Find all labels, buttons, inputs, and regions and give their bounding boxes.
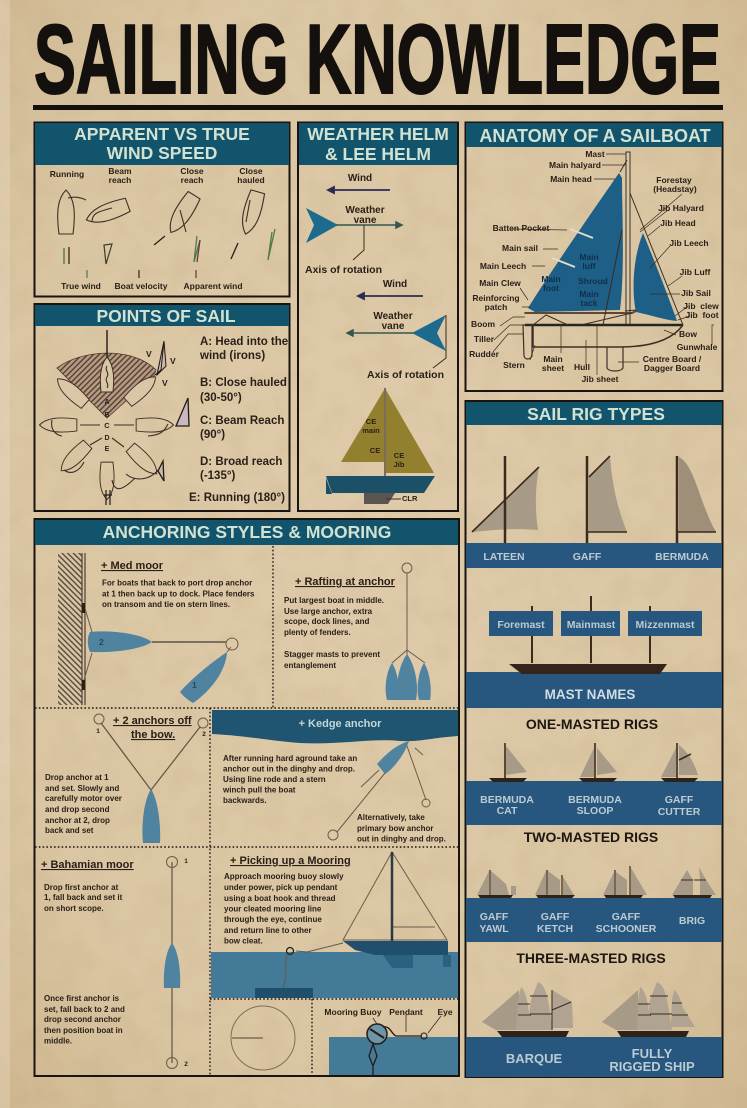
section: picking up a mooring: under power, pick up pendant xyxy=(224,883,338,892)
part labels: Main Leech xyxy=(480,261,526,271)
section: one-masted rigs: BERMUDA xyxy=(480,794,534,806)
section: one-masted rigs: CUTTER xyxy=(658,806,701,818)
heading: apparent vs true wind speed: APPARENT VS TRUE xyxy=(74,124,250,144)
point of sail labels: hauled xyxy=(237,175,265,185)
section: two anchors off the bow: + 2 anchors off xyxy=(113,715,192,727)
section: three-masted rigs: BARQUE xyxy=(506,1051,562,1066)
diagram: weather vane one: Wind xyxy=(348,173,372,184)
section: kedge anchor: + Kedge anchor xyxy=(299,718,382,730)
section: rafting at anchor: scope, dock lines, and xyxy=(284,617,369,626)
legend text: points of sail: B: Close hauled xyxy=(200,377,287,389)
diagram: weather vane two: Wind xyxy=(383,279,407,290)
section: anchor circle xyxy=(231,1006,295,1070)
icon: four boat hulls xyxy=(58,190,266,237)
section: two-masted rigs: SCHOONER xyxy=(596,923,657,935)
legend text: points of sail: (90°) xyxy=(200,429,225,441)
label leader lines xyxy=(493,154,714,375)
section: two anchors off the bow xyxy=(45,714,208,843)
part labels: Forestay xyxy=(656,175,692,185)
part labels: Bow xyxy=(679,329,697,339)
part labels: Jib Head xyxy=(660,218,696,228)
section: one-masted rigs: CAT xyxy=(497,805,518,817)
legend text: points of sail: wind (irons) xyxy=(199,350,265,362)
part labels: Main Clew xyxy=(479,278,521,288)
part labels: Jib Luff xyxy=(680,267,711,277)
section: bahamian moor: middle. xyxy=(44,1036,72,1046)
section: two-masted rigs: GAFF xyxy=(480,911,509,923)
section: bahamian moor xyxy=(41,856,188,1068)
chart: no-sail zone and boats: V xyxy=(170,356,176,366)
section: picking up a mooring: through the eye, continue xyxy=(224,915,322,924)
section: two-masted rigs: YAWL xyxy=(479,923,509,935)
section: one-masted rigs: SLOOP xyxy=(577,805,613,817)
section: mooring buoy detail: Pendant xyxy=(389,1007,423,1017)
section: one-masted rigs xyxy=(466,716,722,825)
part labels: tack xyxy=(580,298,598,308)
diagram: weather vane two: Axis of rotation xyxy=(367,369,444,381)
part labels: sheet xyxy=(542,363,564,373)
diagram: weather vane one: Axis of rotation xyxy=(305,264,382,276)
rig: lateen, gaff, bermuda xyxy=(466,456,722,568)
section: mooring buoy detail xyxy=(324,1007,458,1076)
panel: anchoring styles and mooring xyxy=(34,519,459,1076)
part labels: luff xyxy=(582,261,596,271)
part labels: Jib Leech xyxy=(669,238,709,248)
section: one-masted rigs: ONE-MASTED RIGS xyxy=(526,716,658,732)
section: picking up a mooring: bow cleat. xyxy=(224,936,263,946)
legend text: points of sail: (30-50°) xyxy=(200,392,242,404)
section: mooring buoy detail: Eye xyxy=(437,1007,453,1017)
diagram: weather vane two: Weather xyxy=(373,311,413,322)
part labels: Main sail xyxy=(502,243,538,253)
section: kedge anchor: After running hard aground take an xyxy=(223,754,357,763)
part labels: Jib clew xyxy=(683,301,719,311)
part labels: Batten Pocket xyxy=(493,223,550,233)
section: rafting at anchor: entanglement xyxy=(284,661,336,670)
diagram: sailboat xyxy=(469,149,719,384)
heading: anchoring styles and mooring: ANCHORING STYLES & MOORING xyxy=(103,522,391,542)
panel: sail rig types xyxy=(466,401,722,1077)
diagram: mast names: Foremast xyxy=(497,619,545,631)
part labels: Main halyard xyxy=(549,160,601,170)
section: two anchors off the bow: back and set xyxy=(45,826,94,835)
part labels: foot xyxy=(543,283,559,293)
diagram: sailboat centre of effort: main xyxy=(362,426,380,435)
boat: gaff schooner xyxy=(603,866,647,898)
section: picking up a mooring: + Picking up a Mooring xyxy=(230,855,351,867)
part labels: Main xyxy=(579,252,599,262)
legend text: points of sail: D: Broad reach xyxy=(200,456,282,468)
diagram: mast names: Mizzenmast xyxy=(636,619,695,631)
part labels: Tiller xyxy=(474,334,495,344)
section: kedge anchor: Using line rode and a stern xyxy=(223,775,326,784)
section: kedge anchor: winch pull the boat xyxy=(222,786,296,794)
section: rafting at anchor: Stagger masts to prevent xyxy=(284,650,380,659)
chart: no-sail zone and boats: E xyxy=(105,446,110,453)
part labels: Centre Board / xyxy=(643,354,702,364)
panel: anatomy of a sailboat xyxy=(466,122,722,391)
section: bahamian moor: + Bahamian moor xyxy=(41,859,134,871)
boat: gaff yawl xyxy=(477,870,516,898)
part labels: Main head xyxy=(550,174,592,184)
section: rafting at anchor: plenty of fenders. xyxy=(284,628,351,637)
section: two-masted rigs xyxy=(466,829,722,942)
section: med moor: on transom and tie on stern lines. xyxy=(102,600,230,609)
legend text: points of sail: E: Running (180°) xyxy=(189,492,285,504)
section: bahamian moor: Once first anchor is xyxy=(44,994,120,1003)
ship: barque xyxy=(482,982,573,1037)
section: bahamian moor: on short scope. xyxy=(44,904,104,913)
chart: no-sail zone and boats: A xyxy=(104,399,110,406)
section: picking up a mooring: and return line to other xyxy=(224,926,312,935)
rig: lateen, gaff, bermuda: BERMUDA xyxy=(655,551,709,563)
heading: weather helm and lee helm: WEATHER HELM xyxy=(307,124,449,144)
part labels: Gunwhale xyxy=(677,342,718,352)
part labels: Jib foot xyxy=(685,310,719,320)
section: mooring buoy detail: Mooring Buoy xyxy=(324,1007,382,1017)
section: kedge anchor xyxy=(212,710,458,844)
ship: fully rigged ship xyxy=(602,982,695,1037)
section: med moor xyxy=(58,553,255,705)
point of sail labels: Close xyxy=(239,166,263,176)
section: kedge anchor: out in dinghy and drop. xyxy=(357,834,446,844)
section: three-masted rigs: THREE-MASTED RIGS xyxy=(516,950,666,966)
part labels: Dagger Board xyxy=(644,363,700,373)
legend text: points of sail: (-135°) xyxy=(200,470,235,482)
part labels: Stern xyxy=(503,360,525,370)
chart: no-sail zone and boats: D xyxy=(104,435,110,442)
diagram: weather vane one: Weather xyxy=(345,205,385,216)
diagram: sailboat centre of effort: Jib xyxy=(394,460,405,469)
section: three-masted rigs xyxy=(466,950,722,1077)
section: two anchors off the bow: anchor at 2, drop xyxy=(45,816,110,825)
section: bahamian moor: then position boat in xyxy=(44,1026,123,1035)
heading: apparent vs true wind speed: WIND SPEED xyxy=(107,143,217,163)
heading: anatomy of a sailboat: ANATOMY OF A SAILBOAT xyxy=(479,126,711,146)
section: picking up a mooring: Approach mooring buoy slowly xyxy=(224,872,344,881)
section: bahamian moor: 2 xyxy=(184,1061,188,1068)
point of sail labels: reach xyxy=(181,175,203,185)
section: picking up a mooring: using a boat hook and thread xyxy=(224,894,336,903)
part labels: Boom xyxy=(471,319,495,329)
section: two anchors off the bow: 1 xyxy=(96,728,100,735)
heading: anchoring styles and mooring xyxy=(35,520,458,545)
section: bahamian moor: set, fall back to 2 and xyxy=(44,1005,125,1014)
diagram: weather vane two xyxy=(347,279,446,381)
panel: points of sail xyxy=(34,304,290,511)
point of sail labels: Close xyxy=(180,166,204,176)
section: two anchors off the bow: carefully motor over xyxy=(45,794,122,803)
section: rafting at anchor: Use large anchor, extra xyxy=(284,607,373,616)
icon: velocity vectors xyxy=(64,229,275,264)
section: med moor: 2 xyxy=(99,637,104,647)
chart: no-sail zone and boats: V xyxy=(162,378,168,388)
panel: weather helm and lee helm xyxy=(298,122,458,511)
part labels: Jib Halyard xyxy=(658,203,704,213)
section: med moor: 1 xyxy=(192,680,197,690)
legend: true wind, boat velocity, apparent wind: Boat velocity xyxy=(115,281,168,291)
part labels: Jib sheet xyxy=(582,374,619,384)
part labels: Rudder xyxy=(469,349,500,359)
section: bahamian moor: drop second anchor xyxy=(44,1015,121,1024)
heading: points of sail: POINTS OF SAIL xyxy=(96,306,236,326)
point of sail labels xyxy=(50,166,265,185)
section: one-masted rigs: GAFF xyxy=(665,794,694,806)
part labels: Main xyxy=(579,289,599,299)
diagram: weather vane one xyxy=(305,173,402,276)
section: two anchors off the bow: and set. Slowly and xyxy=(45,784,119,793)
legend: true wind, boat velocity, apparent wind: Apparent wind xyxy=(183,281,243,291)
point of sail labels: Running xyxy=(50,169,84,179)
section: picking up a mooring xyxy=(211,852,458,998)
point of sail labels: reach xyxy=(109,175,131,185)
section: rafting at anchor: + Rafting at anchor xyxy=(295,576,396,588)
legend text: points of sail xyxy=(189,336,288,504)
section: bahamian moor: Drop first anchor at xyxy=(44,883,119,892)
chart: no-sail zone and boats: B xyxy=(104,412,110,419)
section: kedge anchor: anchor out in the dinghy and drop. xyxy=(223,764,355,774)
diagram: mast names: MAST NAMES xyxy=(545,687,635,702)
diagram: sailboat centre of effort: CE xyxy=(394,451,404,460)
section: kedge anchor: Alternatively, take xyxy=(357,813,425,822)
diagram: sailboat centre of effort: CE xyxy=(370,446,380,455)
legend: true wind, boat velocity, apparent wind xyxy=(61,270,243,291)
heading: sail rig types: SAIL RIG TYPES xyxy=(527,404,665,424)
section: one-masted rigs: BERMUDA xyxy=(568,794,622,806)
section: kedge anchor: primary bow anchor xyxy=(357,824,433,833)
section: two anchors off the bow: 2 xyxy=(202,731,206,738)
diagram: sailboat centre of effort: CLR xyxy=(402,494,418,503)
diagram: sailboat centre of effort xyxy=(326,388,435,504)
legend text: points of sail: C: Beam Reach xyxy=(200,415,284,427)
chart: no-sail zone and boats: V xyxy=(146,349,152,359)
section: two-masted rigs: BRIG xyxy=(679,915,705,927)
section: three-masted rigs: RIGGED SHIP xyxy=(609,1059,695,1074)
section: two-masted rigs: GAFF xyxy=(541,911,570,923)
heading: sail rig types xyxy=(466,402,722,425)
point of sail labels: Beam xyxy=(108,166,132,176)
part labels: Main xyxy=(541,274,561,284)
boat: gaff ketch xyxy=(535,870,575,898)
part labels: Main xyxy=(543,354,563,364)
section: rafting at anchor xyxy=(284,563,431,700)
boat: brig xyxy=(672,867,716,898)
section: two-masted rigs: KETCH xyxy=(537,923,573,935)
rig: lateen, gaff, bermuda: LATEEN xyxy=(483,551,525,563)
chart: no-sail zone and boats xyxy=(39,330,189,505)
diagram: weather vane two: vane xyxy=(382,321,405,332)
legend: true wind, boat velocity, apparent wind: True wind xyxy=(61,281,101,291)
panel: apparent vs true wind speed xyxy=(34,122,290,296)
section: kedge anchor: backwards. xyxy=(223,796,267,805)
diagram: sailboat centre of effort: CE xyxy=(366,417,376,426)
part labels: (Headstay) xyxy=(653,184,697,194)
section: bahamian moor: 1, fall back and set it xyxy=(44,893,123,902)
legend text: points of sail: A: Head into the xyxy=(200,336,288,348)
part labels: Reinforcing xyxy=(472,293,520,303)
section: two-masted rigs: GAFF xyxy=(612,911,641,923)
heading: weather helm and lee helm: & LEE HELM xyxy=(325,144,431,164)
section: med moor: For boats that back to port drop anchor xyxy=(102,578,252,588)
part labels: Hull xyxy=(574,362,590,372)
heading: weather helm and lee helm xyxy=(299,123,457,165)
section: two anchors off the bow: Drop anchor at 1 xyxy=(45,773,109,782)
section: med moor: + Med moor xyxy=(101,560,164,572)
part labels: Shroud xyxy=(578,276,608,286)
diagram: mast names xyxy=(466,596,722,708)
part labels: Mast xyxy=(585,149,605,159)
section: rafting at anchor: Put largest boat in middle. xyxy=(284,596,384,605)
heading: apparent vs true wind speed xyxy=(35,123,289,165)
part labels: Jib Sail xyxy=(681,288,711,298)
section: three-masted rigs: FULLY xyxy=(632,1046,673,1061)
rig: lateen, gaff, bermuda: GAFF xyxy=(573,551,602,563)
diagram: weather vane one: vane xyxy=(354,215,377,226)
section: bahamian moor: 1 xyxy=(184,858,188,865)
section: med moor: at 1 then back up to dock. Place fenders xyxy=(102,590,255,598)
section: two anchors off the bow: and drop second xyxy=(45,805,110,814)
section: picking up a mooring: your cleated mooring line xyxy=(224,904,322,914)
diagram: mast names: Mainmast xyxy=(567,619,616,631)
part labels: patch xyxy=(485,302,507,312)
chart: no-sail zone and boats: C xyxy=(104,421,110,430)
part labels xyxy=(469,149,719,384)
heading: points of sail xyxy=(35,305,289,326)
section: two-masted rigs: TWO-MASTED RIGS xyxy=(524,829,658,845)
section: two anchors off the bow: the bow. xyxy=(131,729,175,741)
